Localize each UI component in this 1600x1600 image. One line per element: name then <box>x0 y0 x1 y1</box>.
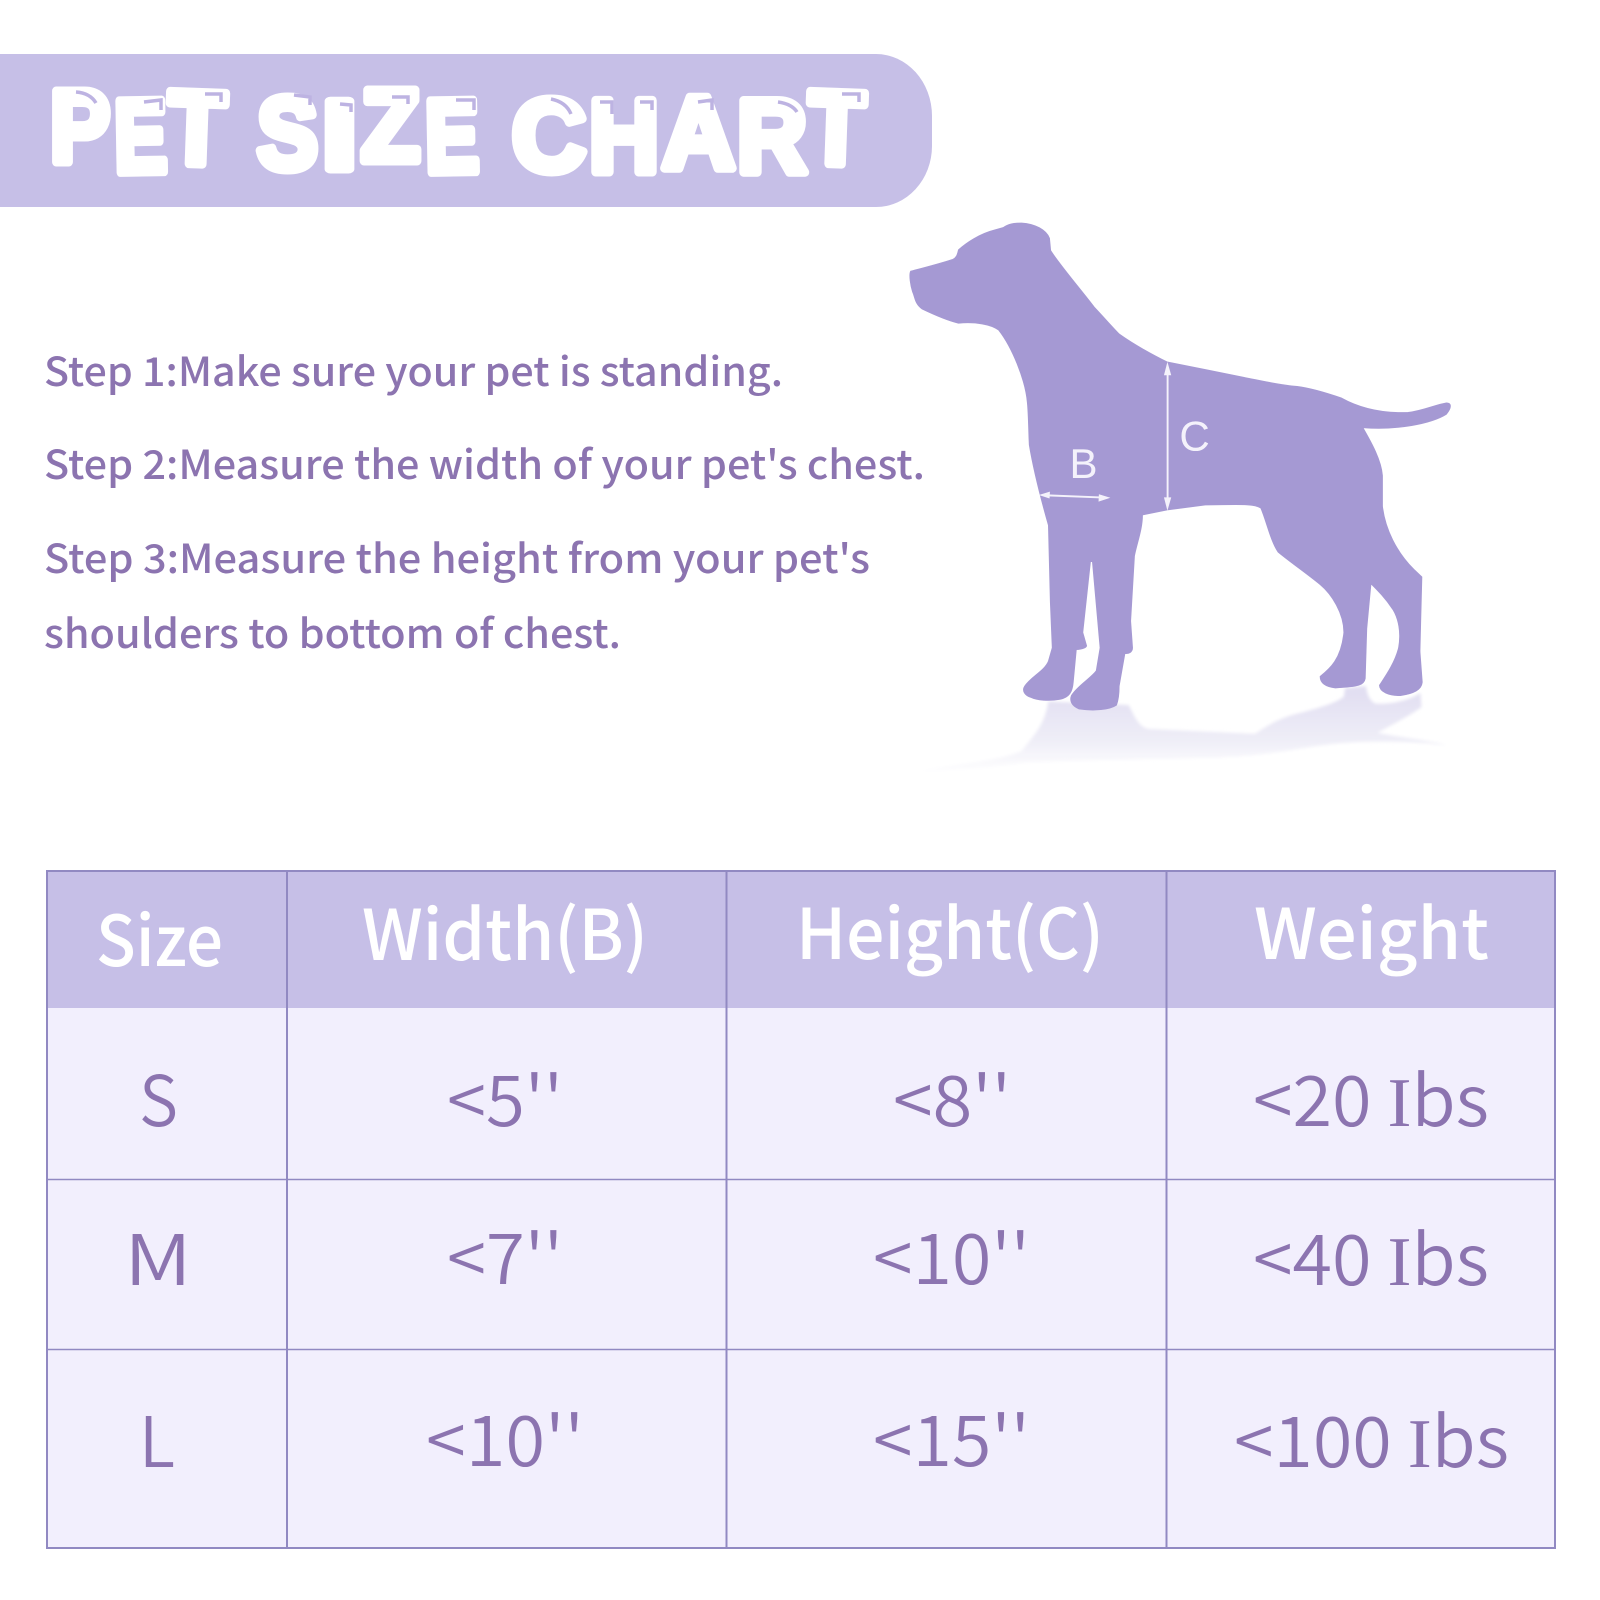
size table <box>47 871 1555 1548</box>
header row <box>96 879 1489 987</box>
row L: <10'' <box>426 1386 584 1487</box>
row S: <20 Ibs <box>1253 1046 1489 1147</box>
table header background <box>47 871 1555 1008</box>
label B: B <box>1070 440 1098 487</box>
title text: PET SIZE CHART: E <box>424 79 480 195</box>
row M: <40 Ibs <box>1253 1205 1489 1306</box>
row M: <10'' <box>873 1204 1030 1305</box>
title text: PET SIZE CHART: R <box>737 79 807 195</box>
header row: Height(C) <box>796 879 1104 980</box>
title text: PET SIZE CHART: S <box>257 76 318 191</box>
steps text block <box>44 340 925 660</box>
row S: S <box>139 1046 178 1147</box>
height arrow C <box>1164 362 1171 511</box>
ground shadow <box>914 686 1447 772</box>
row S <box>139 1046 1489 1147</box>
row L <box>139 1386 1509 1488</box>
title text: PET SIZE CHART: E <box>113 79 168 195</box>
row M <box>124 1204 1489 1306</box>
title text: PET SIZE CHART: I <box>322 80 357 190</box>
title text: PET SIZE CHART <box>50 68 867 195</box>
step 3: shoulders to bottom of chest. <box>44 602 621 660</box>
step 2: Step 2:Measure the width of your pet's chest. <box>44 433 925 491</box>
title text: PET SIZE CHART: P <box>50 69 110 184</box>
title text: PET SIZE CHART: A <box>662 75 735 190</box>
row L: <15'' <box>873 1386 1030 1487</box>
title text: PET SIZE CHART: C <box>512 78 586 193</box>
title text: PET SIZE CHART: T <box>806 70 867 188</box>
title banner <box>0 54 932 207</box>
dog measurement illustration <box>910 223 1450 772</box>
table grid <box>47 871 1555 1548</box>
step 3: Step 3:Measure the height from your pet's <box>44 527 870 585</box>
row S: <8'' <box>893 1046 1011 1147</box>
width arrow B <box>1039 492 1110 502</box>
title text: PET SIZE CHART: H <box>589 79 659 195</box>
header row: Size <box>96 886 223 987</box>
title text: PET SIZE CHART: Z <box>361 68 420 183</box>
step 1: Step 1:Make sure your pet is standing. <box>44 340 783 398</box>
row M: M <box>124 1205 192 1306</box>
label C: C <box>1179 413 1210 460</box>
header row: Width(B) <box>362 880 648 981</box>
step 3 <box>44 527 870 660</box>
dog silhouette <box>910 223 1450 710</box>
banner background <box>0 54 932 207</box>
table body background <box>47 1008 1555 1548</box>
title text: PET SIZE CHART: T <box>166 70 228 188</box>
row S: <5'' <box>447 1046 563 1147</box>
row L: <100 Ibs <box>1234 1387 1509 1488</box>
row M: <7'' <box>447 1204 563 1305</box>
row L: L <box>139 1387 175 1488</box>
header row: Weight <box>1254 879 1489 980</box>
